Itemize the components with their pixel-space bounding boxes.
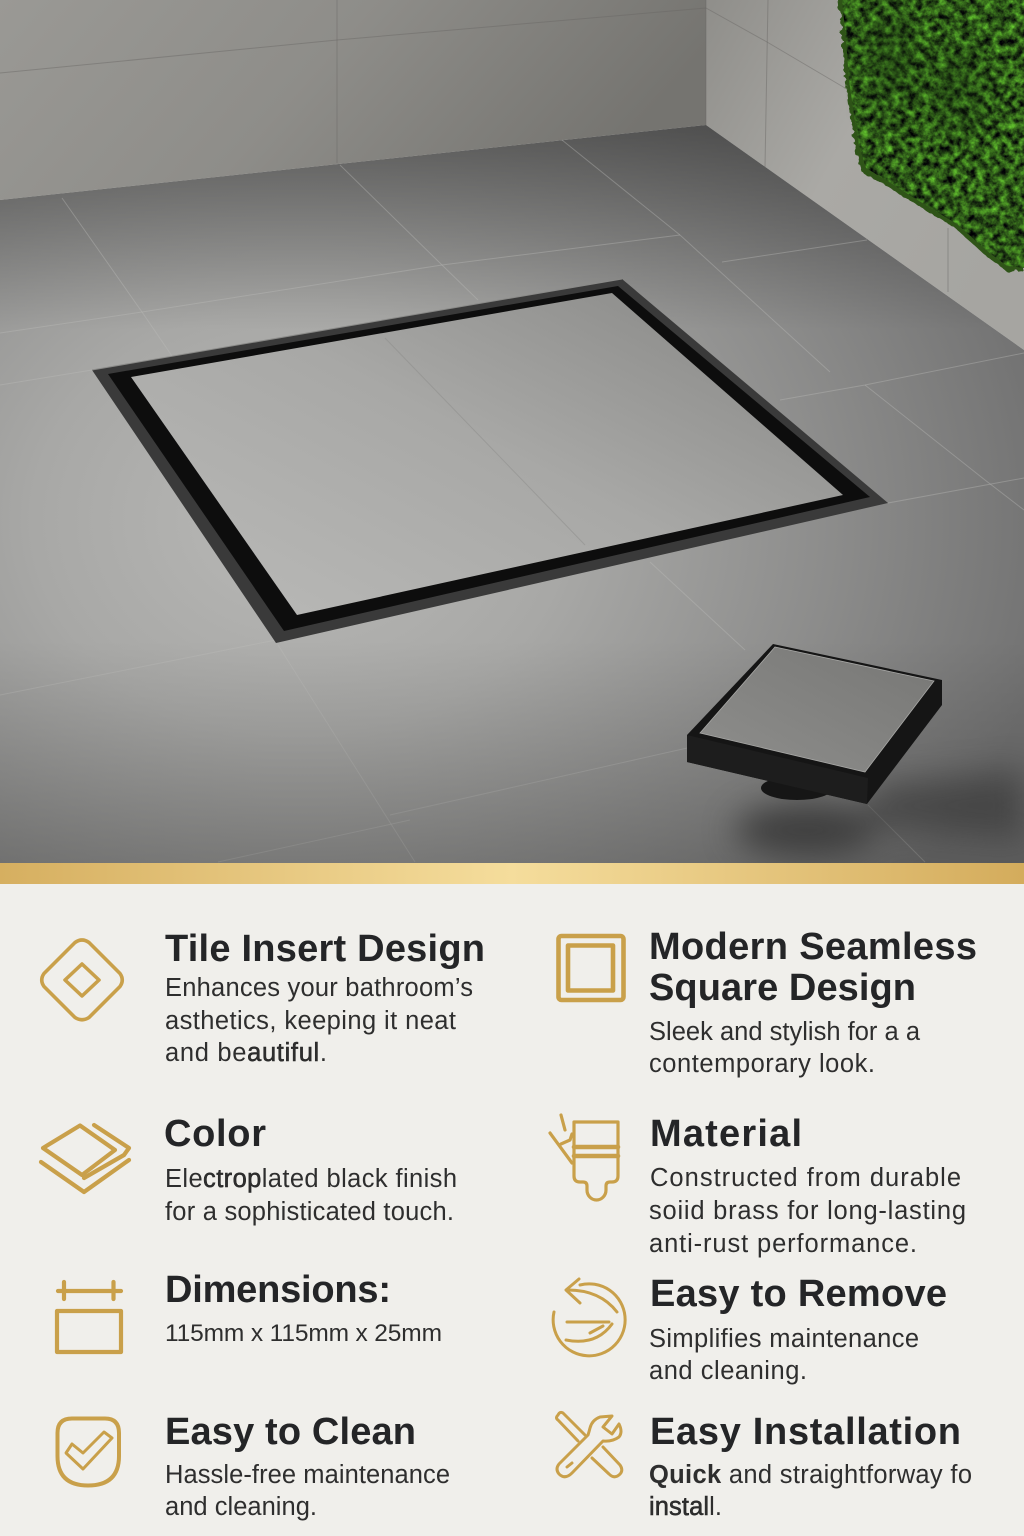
icon: diamond tile [42, 940, 122, 1020]
icon: nested squares [558, 936, 624, 1000]
feature panel background [0, 884, 1024, 1536]
heading: Tile Insert Design [165, 928, 485, 970]
description [165, 1461, 450, 1521]
heading: Material [650, 1113, 802, 1155]
description: Simplifies maintenance [649, 1325, 919, 1353]
feature: modern seamless square design [558, 926, 977, 1078]
description: soiid brass for long-lasting [649, 1197, 966, 1225]
feature: dimensions [57, 1269, 442, 1352]
icon: dimension ruler [57, 1282, 121, 1352]
icon: shield with check [58, 1418, 119, 1486]
back wall [0, 0, 706, 200]
description [649, 1164, 966, 1258]
photo: shower floor scene [0, 0, 1024, 863]
description: and cleaning. [649, 1357, 807, 1385]
description: 115mm x 115mm x 25mm [165, 1320, 442, 1347]
feature: easy to clean [58, 1411, 450, 1521]
icon: removal arrow circle [553, 1279, 625, 1356]
description [649, 1461, 972, 1521]
floor tiles [0, 125, 1024, 863]
description [649, 1325, 919, 1385]
feature: easy to remove [553, 1273, 947, 1385]
description: Enhances your bathroom’s [165, 974, 473, 1002]
heading [649, 926, 977, 1009]
heading: Easy to Clean [165, 1411, 416, 1453]
description: for a sophisticated touch. [165, 1198, 454, 1226]
heading: Easy Installation [650, 1411, 961, 1453]
description: Quick and straightforway fo [649, 1461, 972, 1489]
description: Constructed from durable [650, 1164, 961, 1192]
description [649, 1018, 921, 1078]
icon: paint brush [550, 1115, 618, 1200]
description: Sleek and stylish for a a [649, 1018, 921, 1046]
heading: Modern Seamless [649, 926, 977, 968]
heading: Dimensions: [165, 1269, 391, 1311]
description: contemporary look. [649, 1050, 875, 1078]
large drain frame [92, 279, 888, 643]
icon: crossed wrench and screwdriver [556, 1412, 622, 1477]
description [165, 1165, 457, 1226]
description: and cleaning. [165, 1493, 317, 1521]
description: install. [649, 1493, 722, 1521]
description: anti-rust performance. [649, 1230, 917, 1258]
description: and beautiful. [165, 1039, 327, 1067]
icon: stacked layers [41, 1125, 129, 1192]
feature: color [41, 1113, 457, 1226]
heading: Square Design [649, 967, 916, 1009]
small drain shadow [735, 770, 1024, 856]
right wall [706, 0, 1024, 350]
feature: tile insert design [42, 928, 485, 1067]
small drain unit [687, 644, 942, 804]
description: asthetics, keeping it neat [165, 1007, 456, 1035]
heading: Easy to Remove [650, 1273, 947, 1315]
feature: easy installation [556, 1411, 972, 1521]
hedge [838, 0, 1024, 272]
gold divider band [0, 863, 1024, 884]
description: Hassle-free maintenance [165, 1461, 450, 1489]
heading: Color [164, 1113, 266, 1155]
feature: material [550, 1113, 966, 1258]
description: Electroplated black finish [165, 1165, 457, 1193]
description [165, 974, 473, 1067]
